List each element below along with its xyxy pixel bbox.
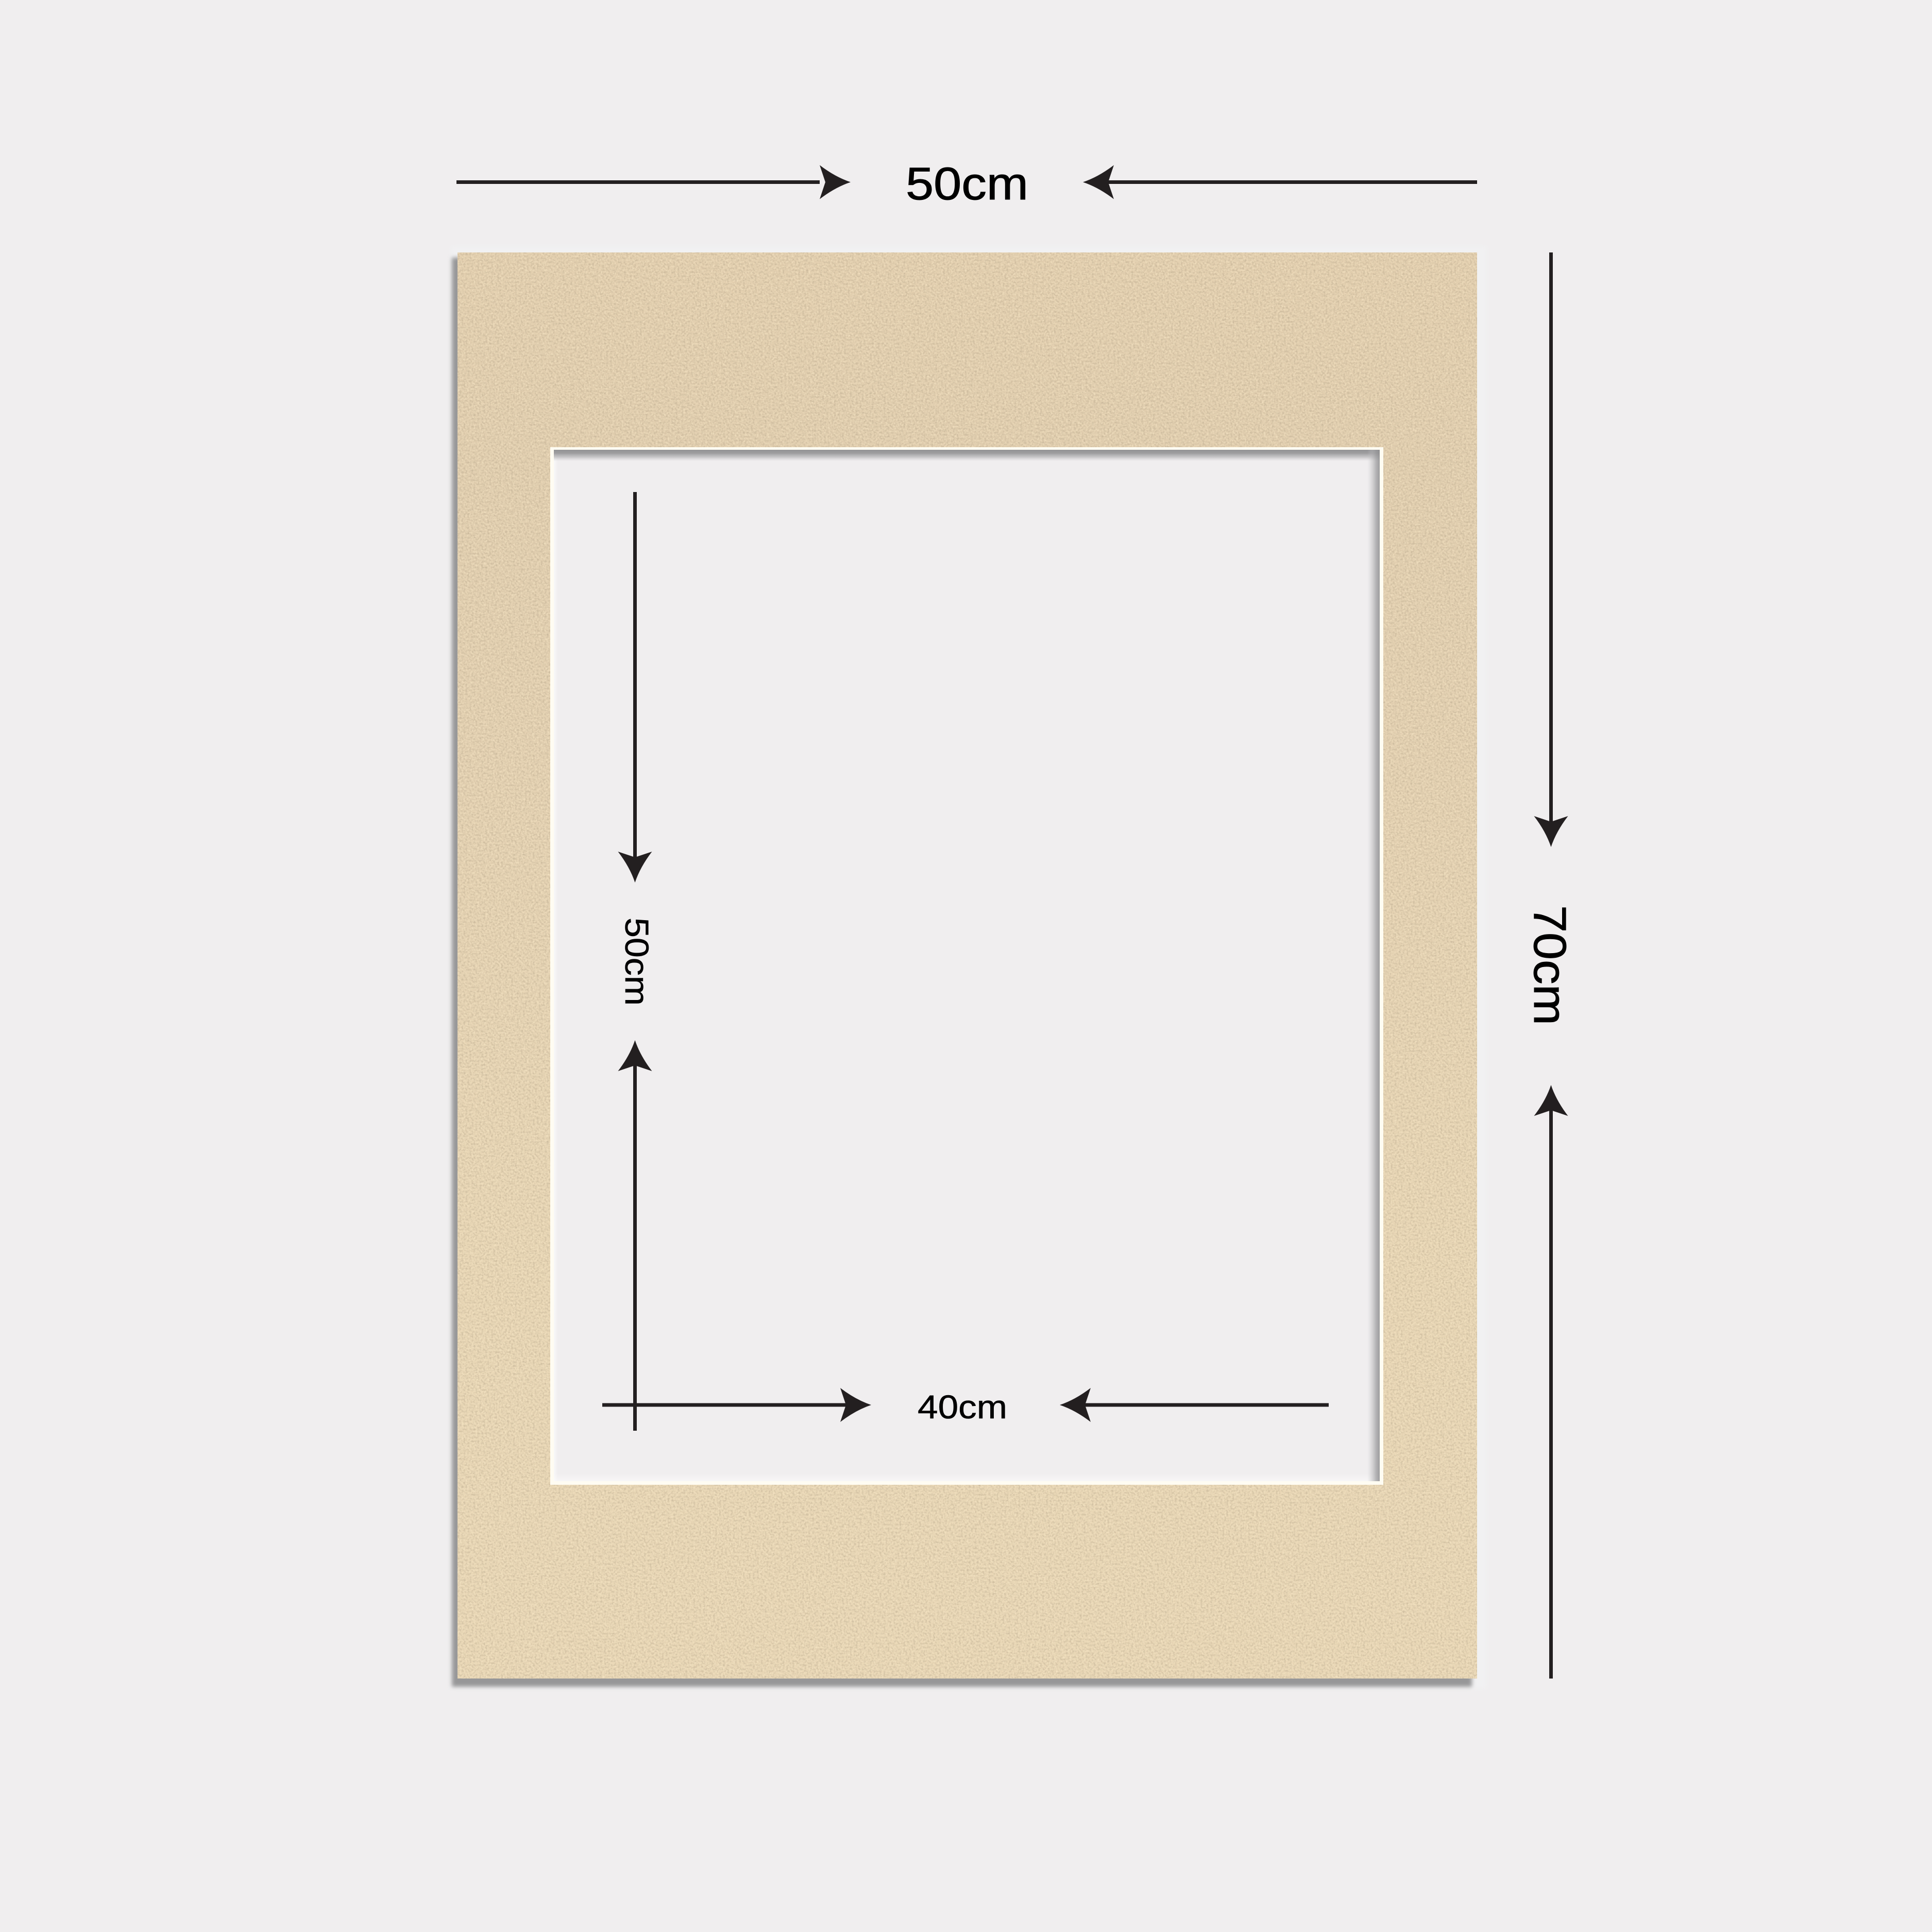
right arrow [602, 1388, 871, 1422]
dimension: window width 40cm [602, 1388, 1329, 1426]
down arrow [1534, 252, 1568, 847]
right arrow [1083, 165, 1477, 199]
down arrow [618, 492, 652, 883]
up arrow [618, 1040, 652, 1431]
label: 50cm: 50cm [906, 158, 1028, 209]
label: 70cm: 70cm [1524, 905, 1576, 1025]
dimension: window height 50cm [618, 492, 655, 1431]
label: 50cm: 50cm [618, 918, 655, 1006]
left arrow [456, 165, 851, 199]
dimension: outer width 50cm [456, 158, 1477, 209]
dimension: outer height 70cm [1524, 252, 1576, 1679]
up arrow [1534, 1085, 1568, 1679]
label: 40cm: 40cm [918, 1388, 1007, 1426]
left arrow [1060, 1388, 1329, 1422]
mat window opening with bevel and inner shadow [550, 447, 1383, 1485]
mat board panel [451, 246, 1487, 1689]
